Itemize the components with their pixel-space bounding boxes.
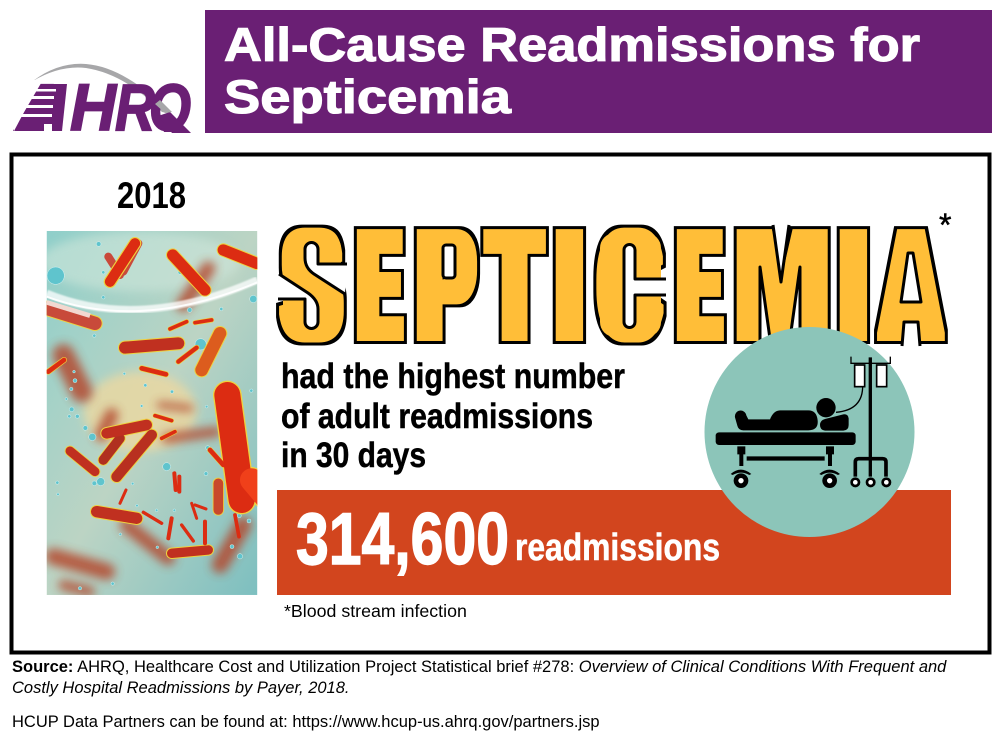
headline: SEPTICEMIA: I	[840, 200, 866, 369]
subhead text: of adult readmissions	[281, 396, 593, 436]
asterisk: *	[939, 207, 951, 243]
title banner	[205, 10, 992, 133]
unit: readmissions	[515, 527, 720, 569]
headline: SEPTICEMIA: T	[489, 200, 540, 369]
patient	[735, 398, 849, 431]
headline: SEPTICEMIA: E	[680, 200, 719, 369]
red readmissions bar	[277, 490, 951, 595]
source citation: Costly Hospital Readmissions by Payer, 2018.	[12, 679, 350, 697]
logo: AHRQ	[13, 64, 191, 133]
headline: SEPTICEMIA: A	[882, 200, 940, 369]
rods: outline	[48, 243, 270, 553]
logo lettering: A	[14, 70, 66, 144]
logo Q tail	[158, 112, 191, 133]
source citation: Source: AHRQ, Healthcare Cost and Utilization Project Statistical brief #278: Overview of Clinical Conditions With Frequent and	[12, 658, 946, 676]
data partners note: HCUP Data Partners can be found at: https://www.hcup-us.ahrq.gov/partners.jsp	[12, 713, 600, 731]
subhead text: in 30 days	[281, 435, 426, 475]
circle icon: patient on bed with IV	[704, 327, 914, 537]
IV stand	[836, 357, 890, 477]
headline: SEPTICEMIA: S	[284, 200, 340, 369]
subhead text: had the highest number	[281, 356, 625, 396]
photo: bacteria	[40, 231, 270, 595]
footnote: *Blood stream infection	[284, 601, 467, 621]
headline: SEPTICEMIA: E	[360, 200, 399, 369]
title text: All-Cause Readmissions for	[224, 18, 920, 71]
headline: SEPTICEMIA: P	[418, 200, 473, 369]
main panel frame	[12, 154, 990, 652]
headline: SEPTICEMIA: M	[736, 200, 828, 369]
year label: 2018	[117, 175, 186, 216]
logo lettering: H	[70, 70, 117, 144]
title text: Septicemia	[224, 70, 512, 123]
logo striped A	[15, 84, 67, 131]
value: 314,600	[296, 499, 509, 580]
headline: SEPTICEMIA: C	[600, 200, 659, 369]
headline: SEPTICEMIA: I	[556, 200, 582, 369]
logo lettering: Q	[149, 70, 191, 144]
logo lettering: R	[115, 70, 155, 144]
bed	[716, 432, 856, 488]
logo arc	[33, 64, 172, 114]
